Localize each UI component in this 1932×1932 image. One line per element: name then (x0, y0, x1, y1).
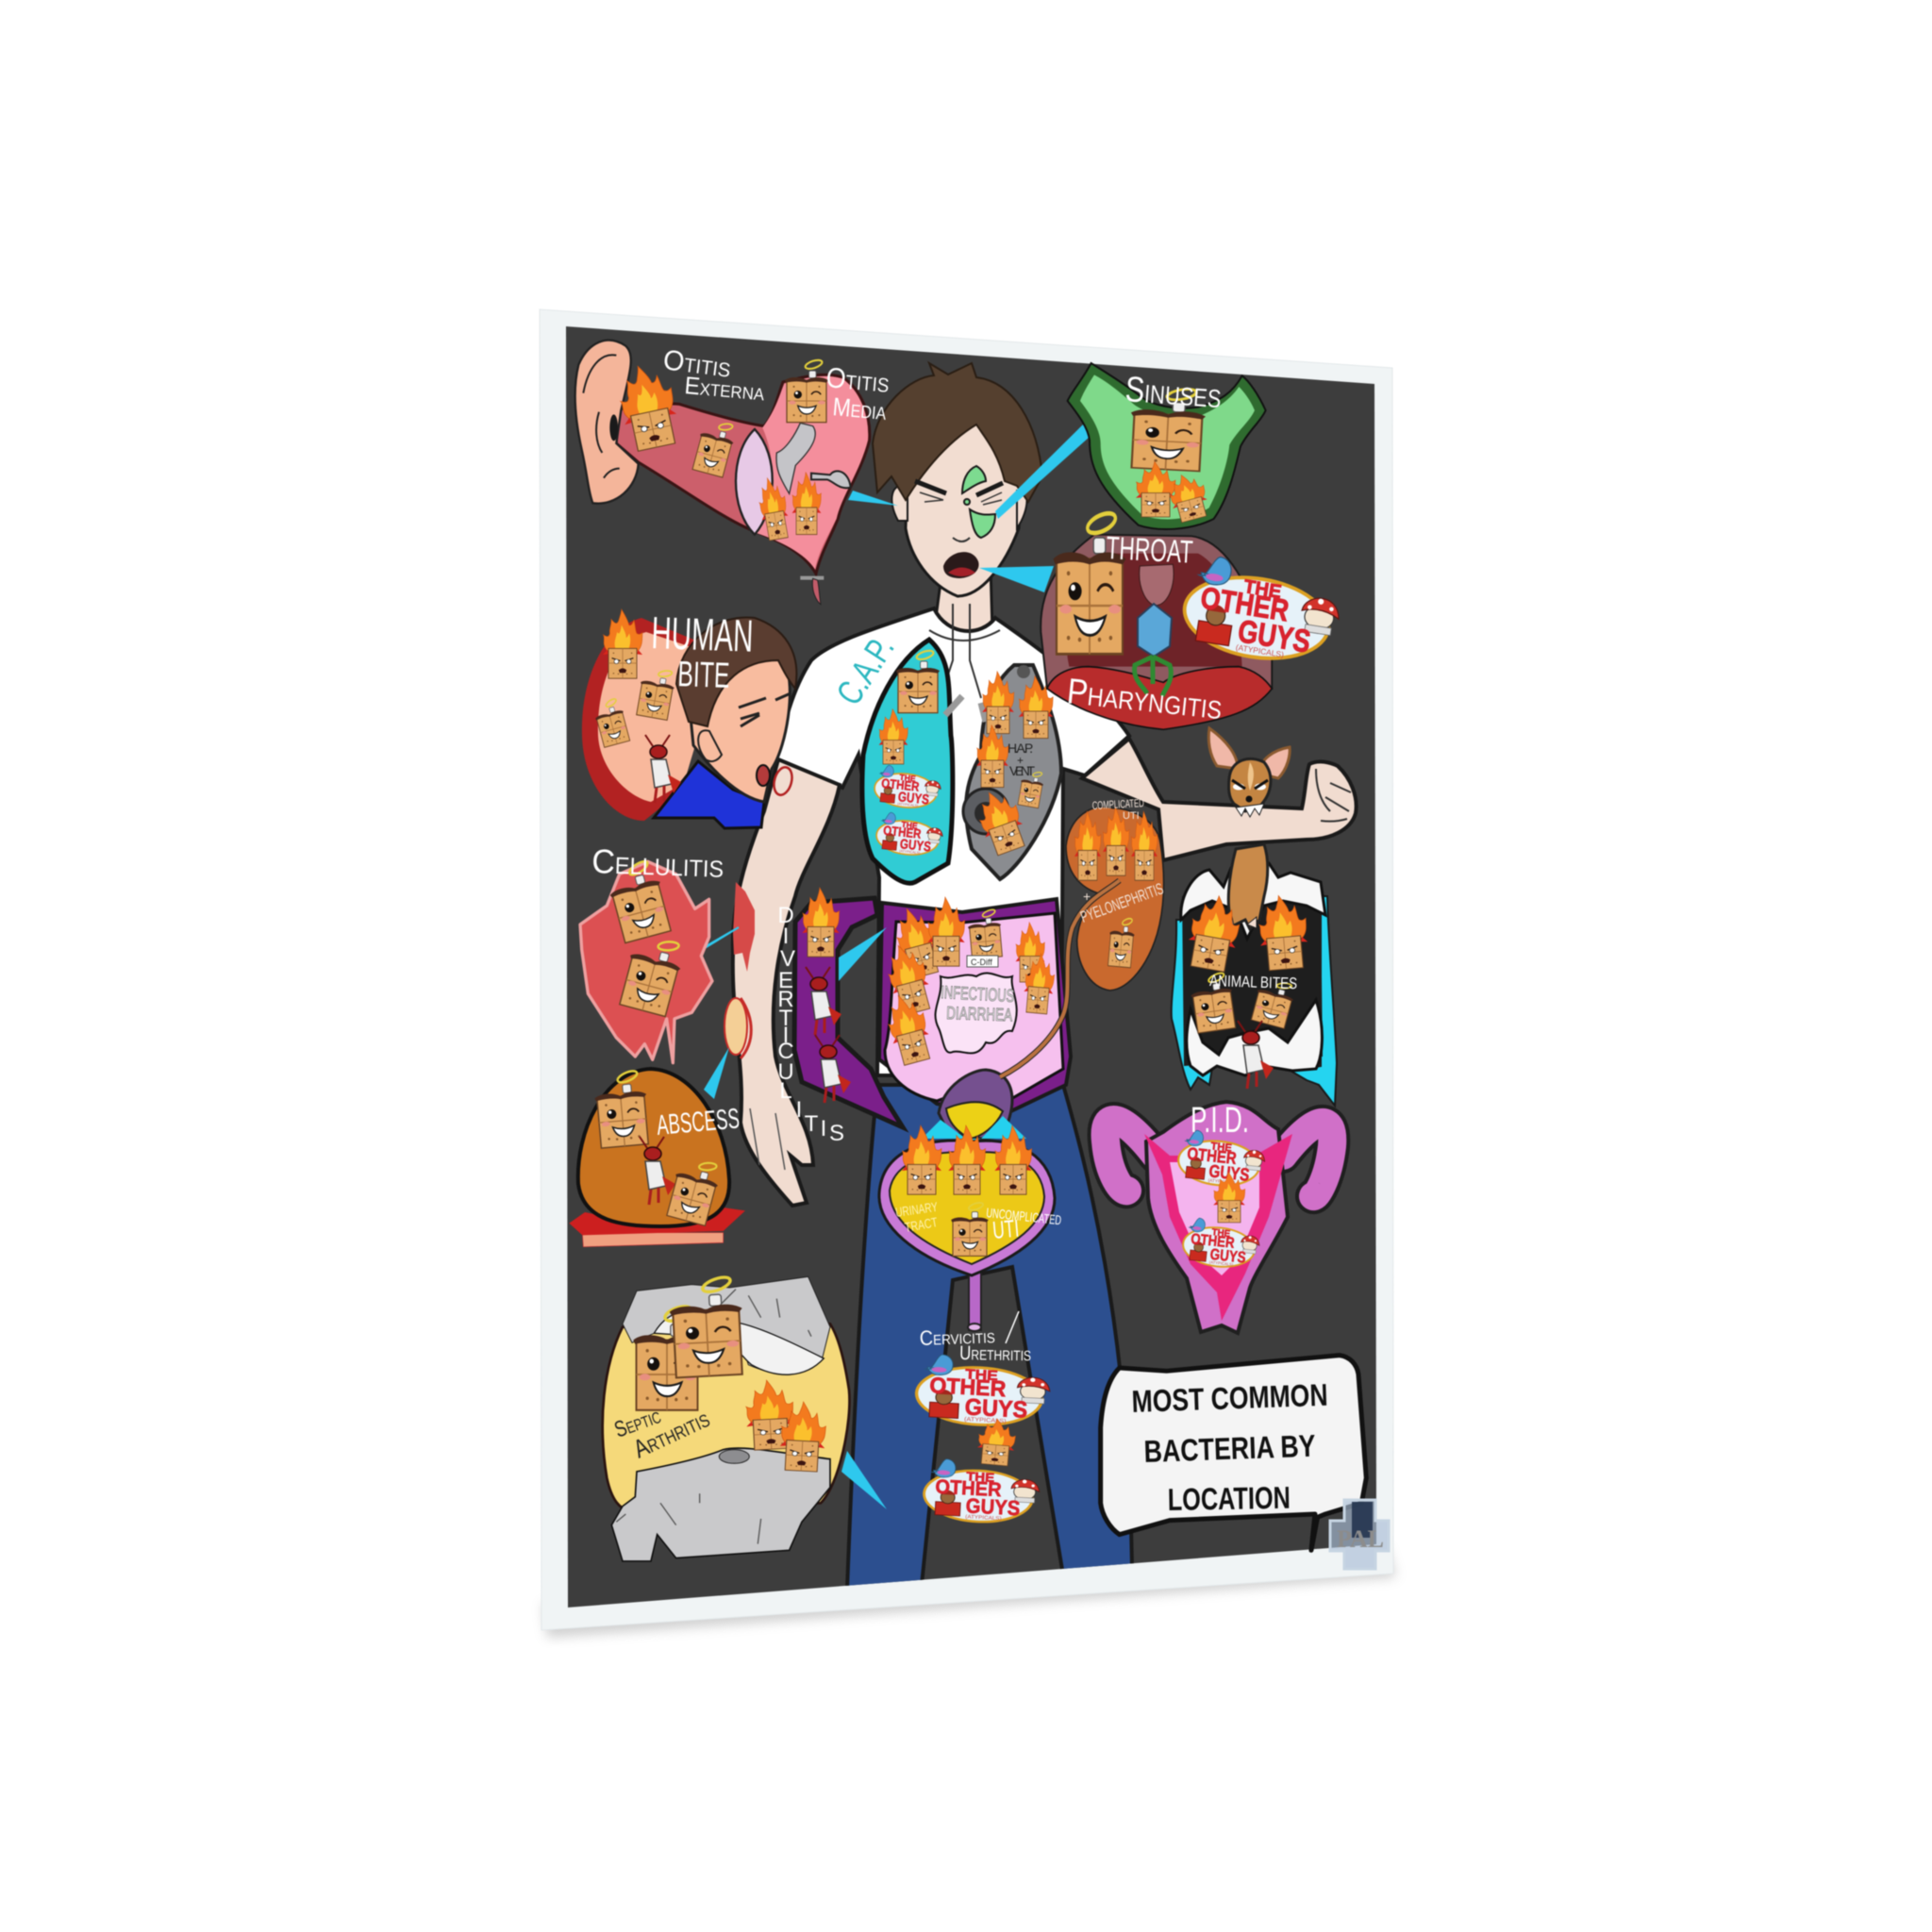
panel: abscess (569, 1068, 745, 1247)
pointer: diverticulitis beam (839, 927, 887, 981)
label: diverticulitis: DIVERTICULITIS (777, 903, 844, 1146)
badge: the other guys: OTHER (881, 775, 920, 794)
bladder (879, 1141, 1055, 1275)
badge: the other guys: GUYS (1236, 613, 1313, 660)
mascot: good cracker (785, 358, 828, 423)
badge: the other guys: THE (1210, 1141, 1233, 1155)
label: complicated UTI: UTI (1123, 810, 1140, 822)
label: animal bites: ANIMAL BITES (1209, 972, 1297, 992)
turbine (963, 665, 1030, 834)
label: uncomplicated UTI (986, 1205, 1062, 1244)
label: otitis externa: Otitis (661, 344, 733, 384)
bite mark (771, 765, 795, 797)
mascot: fire cracker (976, 1417, 1017, 1466)
uterus body (1146, 1102, 1288, 1333)
badge: the other guys: OTHER (1190, 1231, 1236, 1252)
mascot: fire cracker (1016, 923, 1044, 982)
badge: the other guys: OTHER (883, 823, 922, 841)
mascot: good cracker (633, 1304, 701, 1410)
mascot: ant (645, 735, 681, 803)
badge: the other guys (923, 1458, 1041, 1524)
label: HAP + vent: VENT (1009, 763, 1035, 778)
label: cellulitis: Cellulitis (591, 841, 724, 885)
mascot: fire cracker (972, 786, 1030, 858)
intestines pink (885, 913, 1063, 1104)
mascot: fire cracker (1213, 1172, 1245, 1223)
pointer: abscess beam (704, 1047, 729, 1099)
badge: the other guys (1178, 553, 1345, 670)
virus blue (1138, 604, 1172, 657)
chihuahua head (1208, 728, 1290, 817)
label: otitis media: Otitis (824, 362, 891, 399)
label: CAP: C.A.P. (829, 629, 902, 712)
badge: the other guys: OTHER (1186, 1144, 1238, 1168)
label: pharyngitis: Pharyngitis (1065, 672, 1224, 727)
mascot: good cracker (1107, 916, 1136, 968)
mascot: ant (1238, 1021, 1274, 1089)
jeans (847, 1085, 1132, 1590)
arm abscess (724, 998, 751, 1058)
mascot: fire cracker (982, 672, 1014, 734)
badge: the other guys: THE (1211, 1227, 1231, 1240)
mascot: fire cracker (1131, 811, 1158, 880)
cyan saliva right (1291, 896, 1337, 1106)
label: septic arthritis: Septic (611, 1403, 664, 1443)
panel: sinuses (1068, 363, 1266, 529)
mascot: ant (806, 967, 841, 1035)
mascot: fire cracker (881, 991, 935, 1067)
ears (891, 485, 1026, 528)
mascot: ant (815, 1035, 851, 1103)
mascot: fire cracker (613, 360, 682, 453)
panel: pharyngitis throat (1041, 509, 1345, 729)
badge: the other guys (915, 1354, 1052, 1428)
blue shirt (654, 761, 764, 828)
mascot: fire cracker (1136, 461, 1175, 517)
panel: otitis externa and media (575, 341, 891, 605)
CAP lung (862, 640, 953, 883)
urethra (968, 1264, 981, 1331)
logo dark panel (1352, 1502, 1373, 1538)
label: PID: P.I.D. (1191, 1101, 1249, 1141)
mascot: good cracker (617, 930, 687, 1017)
panel: cellulitis (580, 841, 724, 1063)
logo text: PAL (1337, 1525, 1384, 1553)
title text: BACTERIA BY (1143, 1428, 1316, 1469)
label: complicated UTI (1091, 796, 1144, 822)
mascot: fire cracker (1257, 893, 1310, 971)
biter expression (739, 693, 791, 726)
badge: the other guys: (ATYPICALS) (965, 1515, 1002, 1522)
title speech bubble (1101, 1356, 1366, 1550)
main figure: man with exposed organs (724, 363, 1357, 1590)
panel: kidney pyelonephritis (1000, 796, 1166, 1077)
neck (936, 578, 994, 630)
fist finger lines (1316, 769, 1351, 822)
badge: the other guys: (ATYPICALS) (1208, 1178, 1236, 1187)
mascot: good cracker (966, 908, 1004, 959)
label: urinary tract: TRACT (904, 1214, 939, 1235)
mascot: fire cracker (1022, 952, 1057, 1014)
white shirt (776, 608, 1129, 1075)
trachea lines (929, 604, 1000, 698)
biter hair (676, 617, 796, 726)
poster white frame (540, 309, 1393, 1630)
mascot: ant (640, 1137, 675, 1205)
label: complicated UTI: COMPLICATED (1091, 796, 1144, 812)
open mouth (943, 552, 979, 578)
mascot: fire cracker (927, 897, 965, 966)
label: pyelonephritis: PYELONEPHRITIS (1078, 879, 1166, 926)
pointer: cellulitis beam (705, 927, 739, 948)
pointer: sinus beam (995, 423, 1090, 519)
label: sinuses: Sinuses (1124, 370, 1223, 416)
pointer: bladder beam (922, 1116, 1026, 1141)
label: otitis media (824, 362, 891, 425)
label: uncomplicated UTI: UTI (991, 1214, 1020, 1244)
pointer: ear beam (848, 491, 898, 506)
mascot: good cracker (592, 1068, 651, 1148)
label: otitis media: Media (831, 392, 888, 425)
badge: the other guys: OTHER (1198, 580, 1291, 627)
mascot: good cracker (1053, 509, 1126, 654)
mascot: good cracker (665, 1153, 724, 1226)
badge: the other guys: GUYS (899, 837, 932, 856)
label: human bite: HUMAN (651, 608, 754, 662)
abscess base (569, 1208, 745, 1247)
badge: the other guys: GUYS (1209, 1245, 1247, 1267)
cyan saliva left (1172, 920, 1212, 1090)
badge: the other guys: OTHER (929, 1374, 1007, 1402)
badge: the other guys: GUYS (897, 790, 930, 808)
panel: human bite (582, 608, 796, 828)
upper teeth (1181, 863, 1325, 939)
label: HAP + vent: H.A.P. (1008, 741, 1033, 756)
label: C-Diff: C-Diff (971, 958, 992, 967)
badge: the other guys: THE (1242, 576, 1283, 603)
panel: infectious diarrhea (881, 897, 1057, 1067)
label: human bite: BITE (677, 655, 730, 696)
PAL logo watermark (1330, 1500, 1389, 1569)
label: throat: THROAT (1106, 530, 1193, 571)
eye squint lines (920, 492, 1002, 505)
label: infectious diarrhea: INFECTIOUS (941, 983, 1015, 1007)
mascot: good cracker (951, 1201, 989, 1256)
title callout (1101, 1356, 1366, 1550)
abscess body (578, 1069, 729, 1226)
panel: HAP and ventilator lung contents (972, 672, 1053, 858)
mascot: fire cracker (890, 904, 943, 980)
diverticulitis colon (794, 898, 903, 1127)
arm wound (733, 882, 755, 972)
sinus marks on face (962, 466, 995, 538)
badge: the other guys: GUYS (964, 1394, 1028, 1423)
left arm (733, 759, 840, 1206)
intestine frame (879, 899, 1071, 1115)
mascot: fire cracker (802, 888, 840, 957)
badge: the other guys: GUYS (1208, 1161, 1250, 1186)
mascot: good cracker (896, 649, 940, 713)
badge: the other guys: (ATYPICALS) (1235, 642, 1285, 659)
joint shape (603, 1276, 849, 1561)
title text: LOCATION (1167, 1480, 1291, 1517)
mascot: good cracker (1017, 769, 1045, 808)
mascot: good cracker (668, 1274, 745, 1378)
purple bladder dome (939, 1070, 1012, 1139)
intestines centre (936, 973, 1017, 1053)
label: slash (1006, 1311, 1019, 1343)
badge: the other guys: (ATYPICALS) (1209, 1259, 1234, 1267)
badge: the other guys: THE (965, 1367, 998, 1384)
title text: MOST COMMON (1131, 1377, 1328, 1419)
kidney shape (1000, 807, 1164, 1077)
mascot: good cracker (691, 416, 739, 477)
nose (953, 538, 970, 541)
poster shadow (542, 1547, 1396, 1638)
label: C-Diff (967, 956, 998, 967)
mascot: fire cracker (792, 473, 821, 535)
panel: cervicitis and urethritis (915, 1311, 1052, 1524)
mouth (1182, 896, 1323, 1066)
ear anatomy (575, 341, 870, 605)
hand finger lines (750, 1108, 785, 1170)
face (906, 414, 1024, 596)
mascot: fire cracker (1184, 892, 1243, 973)
mascot: fire cracker (902, 1125, 941, 1194)
panel: animal bites (1172, 728, 1337, 1106)
mantis legs (1135, 657, 1171, 696)
panel: septic arthritis (603, 1274, 849, 1561)
badge: the other guys (1176, 1128, 1267, 1190)
mascot: fire cracker (603, 609, 642, 678)
mascot: fire cracker (948, 1125, 986, 1194)
mascot: good cracker (1189, 971, 1238, 1033)
badge: the other guys: THE (899, 773, 916, 783)
throat shape (1041, 535, 1272, 729)
mascot: fire cracker (994, 1125, 1032, 1194)
badge: the other guys: OTHER (935, 1475, 1002, 1501)
pointer: throat beam (979, 566, 1054, 592)
mascot: fire cracker (1103, 807, 1129, 875)
biter face (689, 653, 790, 802)
mascot: good cracker (591, 696, 631, 748)
badge: the other guys: GUYS (965, 1495, 1021, 1521)
mascot: fire cracker (778, 1401, 827, 1472)
mascot: good cracker (604, 857, 674, 943)
badge: the other guys: (ATYPICALS) (964, 1417, 1007, 1424)
label: urinary tract (894, 1199, 939, 1235)
chihuahua body (1219, 844, 1268, 929)
label: urethritis: Urethritis (959, 1342, 1031, 1365)
panel: diverticulitis (777, 888, 851, 1146)
sinus shape (1068, 363, 1266, 529)
eyes and brows (915, 481, 1003, 495)
label: infectious diarrhea (941, 983, 1015, 1025)
label: infectious diarrhea: DIARRHEA (946, 1004, 1013, 1025)
title text (1131, 1377, 1328, 1517)
badge: the other guys: (ATYPICALS) (899, 849, 920, 855)
panel: pelvic inflammatory disease (1106, 1101, 1332, 1333)
label: otitis externa: Externa (683, 371, 766, 406)
label: cervicitis: Cervicitis (919, 1324, 995, 1350)
uterus inner (1170, 1162, 1259, 1275)
fallopian tube left (1106, 1120, 1156, 1191)
label: septic arthritis: Arthritis (629, 1404, 714, 1463)
label: abscess: ABSCESS (656, 1103, 741, 1141)
label: HAP + vent (1008, 741, 1035, 778)
badge: the other guys: (ATYPICALS) (897, 802, 918, 808)
HAP mechanical lung (966, 665, 1061, 879)
badge: the other guys (873, 764, 942, 811)
mascot: fire cracker (1165, 470, 1211, 524)
mascot: fire cracker (879, 708, 908, 764)
mascot: good cracker (635, 665, 677, 721)
lower teeth (1187, 1000, 1322, 1075)
badge: the other guys: THE (966, 1469, 995, 1485)
badge: the other guys: THE (901, 820, 918, 830)
label: pyelonephritis (1078, 879, 1166, 926)
fallopian tube right (1283, 1123, 1332, 1196)
right arm with fist (1082, 739, 1357, 860)
biter ear (698, 730, 722, 761)
bite wound (582, 618, 703, 821)
biter mouth (757, 765, 770, 786)
label: human bite (651, 608, 754, 696)
uterus cavity (1144, 1134, 1292, 1321)
mascot: fire cracker (881, 941, 935, 1017)
badge: the other guys (1181, 1217, 1261, 1271)
label: septic arthritis (611, 1403, 714, 1463)
mascot: fire cracker (1074, 811, 1101, 880)
label: HAP + vent: + (1017, 754, 1024, 767)
label: uncomplicated UTI: UNCOMPLICATED (986, 1205, 1062, 1227)
badge: the other guys (874, 811, 944, 858)
mascot: fire cracker (744, 1379, 795, 1450)
mascot: good cracker (1250, 975, 1297, 1029)
label: pyelonephritis: + (1083, 889, 1091, 904)
mascot: fire cracker (755, 475, 791, 541)
mascot: good cracker (1128, 384, 1208, 472)
label: otitis externa (661, 344, 766, 406)
hair (873, 363, 1042, 502)
panel: urinary tract (894, 1125, 1062, 1256)
panel: CAP lung contents (829, 629, 944, 858)
mascot: fire cracker (1019, 676, 1053, 739)
mascot: fire cracker (976, 725, 1008, 788)
poster dark background (566, 326, 1376, 1607)
bronchi (945, 696, 986, 722)
cellulitis splat (580, 861, 712, 1063)
label: urinary tract: URINARY (894, 1199, 939, 1220)
pointer: septic arthritis beam (841, 1451, 887, 1509)
